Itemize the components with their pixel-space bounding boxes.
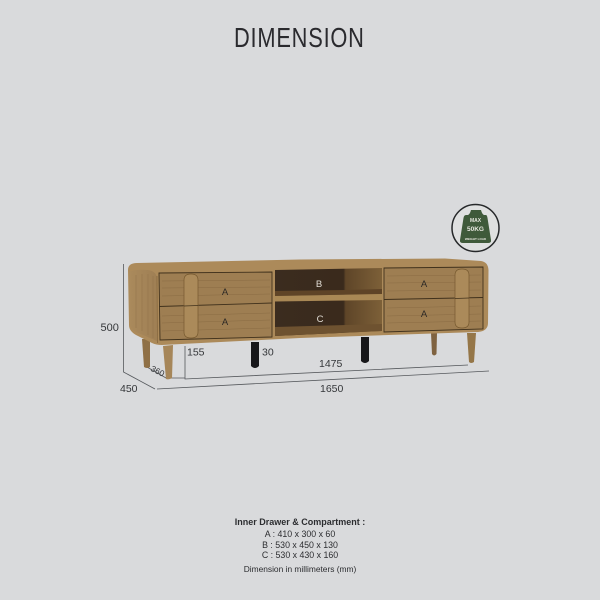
- drawer and compartment labels: A: [222, 317, 229, 328]
- furniture: TV console: [128, 258, 488, 345]
- inner drawer and compartment notes: Inner Drawer & Compartment :: [235, 517, 365, 527]
- right drawers: [384, 267, 483, 332]
- dimension labels: 500: [100, 322, 119, 334]
- icon: max weight load badge: [452, 204, 499, 252]
- drawer and compartment labels: A: [421, 279, 428, 290]
- inner drawer and compartment notes: Dimension in millimeters (mm): [244, 564, 357, 574]
- drawer and compartment labels: A: [222, 287, 229, 298]
- dimension labels: 155: [187, 346, 205, 358]
- dimension labels: 1650: [320, 383, 344, 395]
- icon: max weight load badge: 50KG: [467, 226, 484, 233]
- dimension lines: [124, 264, 489, 389]
- cabinet body: [128, 258, 488, 345]
- left drawers: [159, 272, 272, 340]
- dimension labels: 450: [120, 383, 138, 395]
- drawer and compartment labels: B: [316, 279, 322, 290]
- inner drawer and compartment notes: B : 530 x 450 x 130: [262, 540, 338, 550]
- furniture: back and rear legs: [142, 333, 437, 368]
- inner drawer and compartment notes: C : 530 x 430 x 160: [262, 550, 338, 560]
- dimension labels: 1475: [319, 358, 343, 370]
- drawer and compartment labels: [222, 279, 428, 328]
- right handle: [455, 269, 469, 328]
- drawer and compartment labels: A: [421, 309, 428, 320]
- side panel: [129, 270, 157, 341]
- title: DIMENSION: [234, 22, 365, 54]
- drawer and compartment labels: C: [317, 314, 324, 325]
- dimension labels: 360: [149, 363, 167, 379]
- floors and shelf: [275, 289, 382, 296]
- icon: max weight load badge: WEIGHT LOAD: [465, 237, 487, 241]
- left handle: [184, 274, 198, 338]
- dimension labels: [100, 322, 344, 395]
- icon: max weight load badge: MAX: [470, 218, 482, 224]
- furniture: front legs: [163, 333, 476, 379]
- inner drawer and compartment notes: A : 410 x 300 x 60: [265, 529, 335, 539]
- dimension labels: 30: [262, 346, 274, 358]
- open compartments: [275, 268, 382, 336]
- inner drawer and compartment notes: [235, 517, 365, 574]
